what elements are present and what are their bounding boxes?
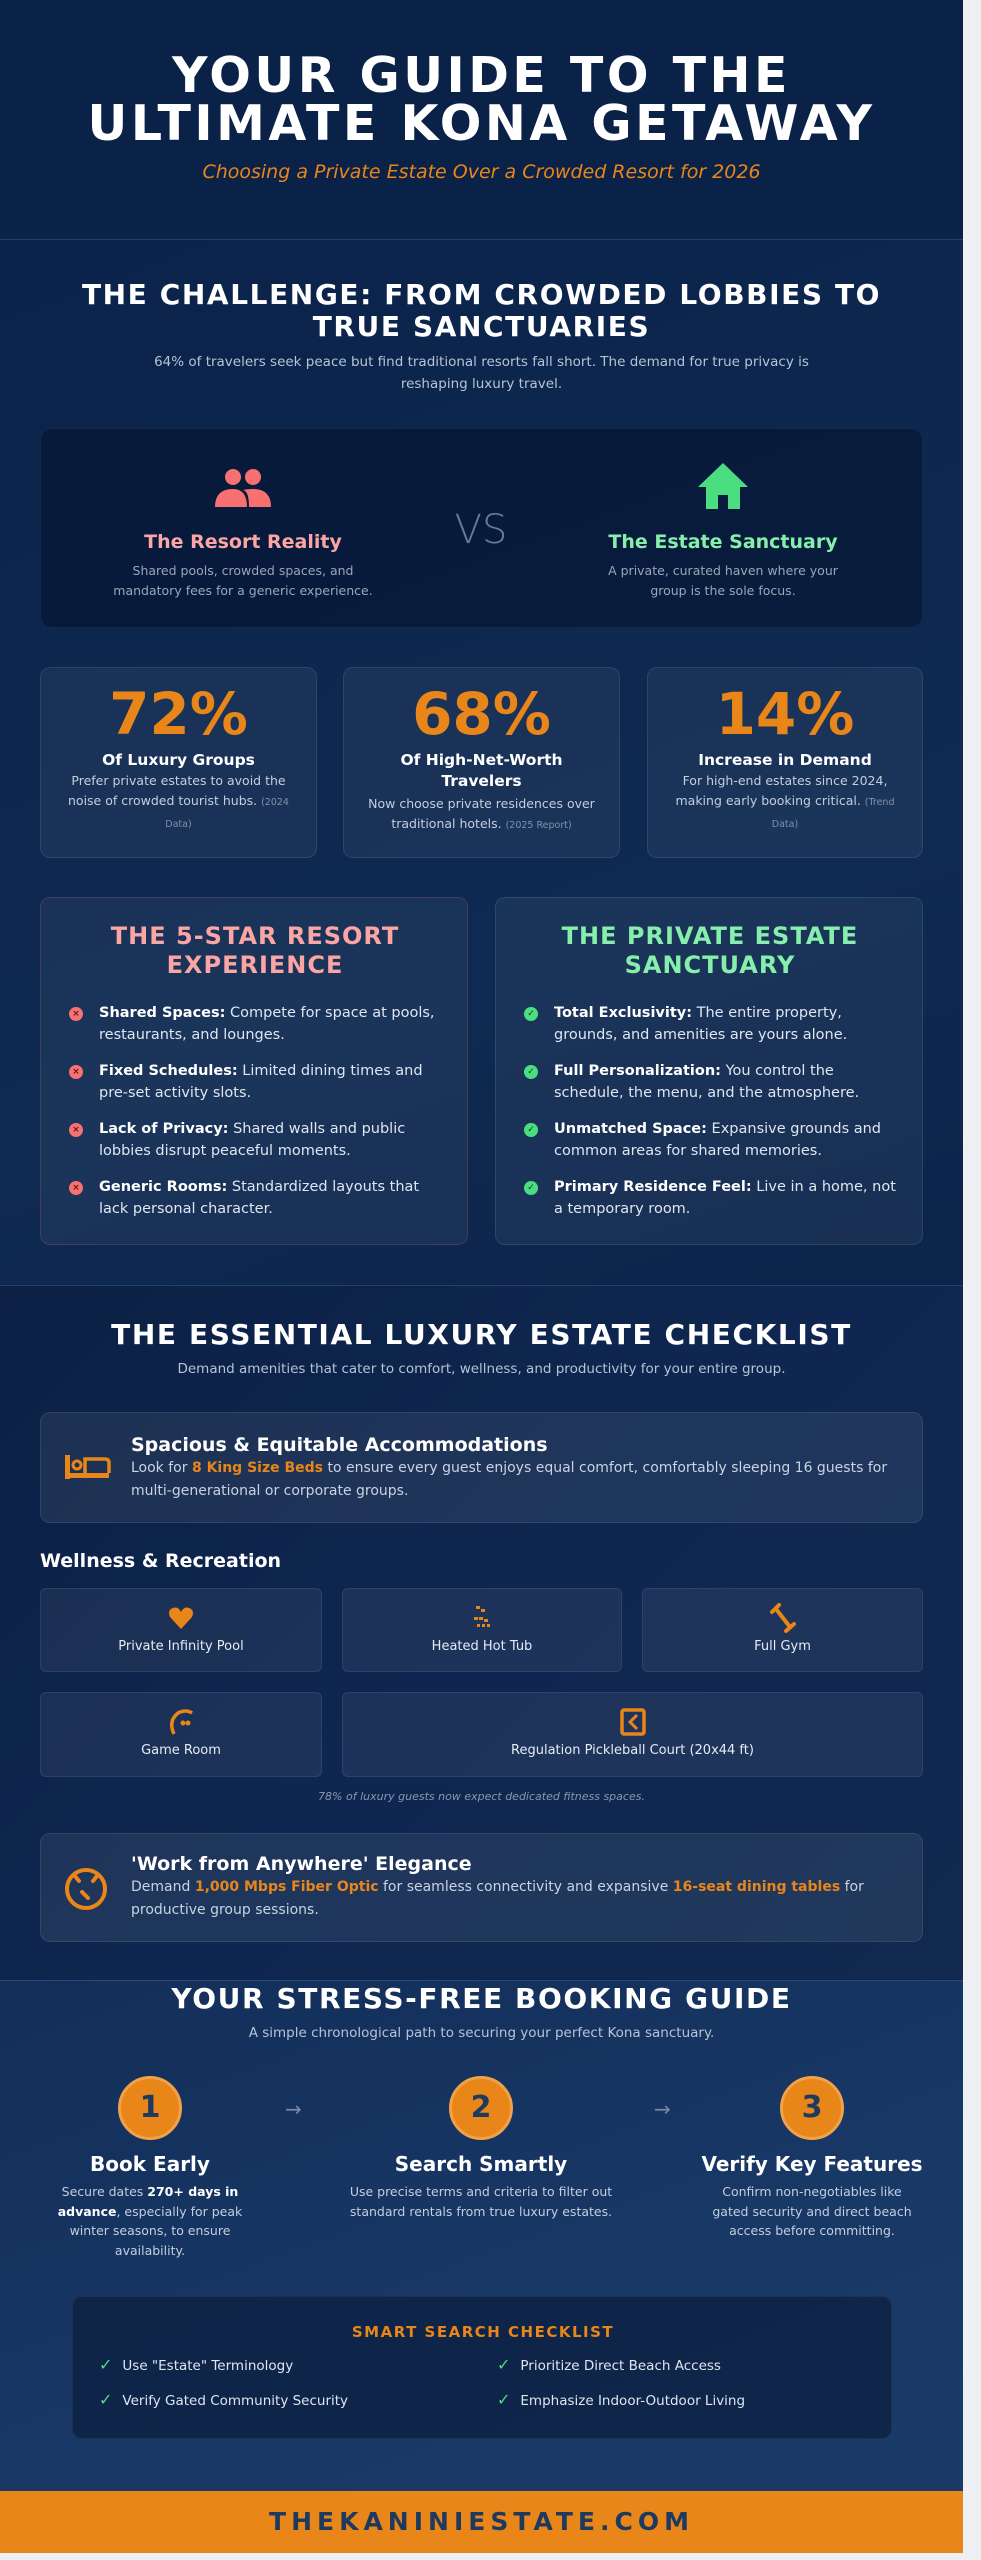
panel: resort experience <box>40 897 468 1245</box>
card: accommodations: Spacious & Equitable Accommodations <box>131 1434 548 1456</box>
section: checklist <box>0 1285 963 1980</box>
heading: YOUR STRESS-FREE BOOKING GUIDE <box>171 1982 792 2015</box>
tile: hot tub: Heated Hot Tub <box>432 1639 532 1654</box>
items <box>524 1005 896 1217</box>
panel: private estate <box>495 897 923 1245</box>
heading: SANCTUARY <box>625 951 795 979</box>
icon: gauge <box>65 1868 107 1910</box>
items: Full Personalization: You control the schedule, the menu, and the atmosphere. <box>554 1063 859 1101</box>
tile: game room <box>40 1692 322 1777</box>
items: Fixed Schedules: Limited dining times and pre-set activity slots. <box>99 1063 423 1101</box>
icon: house <box>698 463 748 509</box>
subheading: Demand amenities that cater to comfort, wellness, and productivity for your entire group. <box>177 1361 786 1377</box>
resort reality: The Resort Reality <box>144 531 342 553</box>
card: accommodations <box>40 1412 923 1523</box>
step 3: Confirm non-negotiables like gated security and direct beach access before committing. <box>712 2184 912 2238</box>
stat card 3: Increase in Demand <box>698 751 872 769</box>
header <box>0 0 963 240</box>
tile: pool <box>40 1588 322 1672</box>
checklist items: ✓ Prioritize Direct Beach Access <box>497 2355 721 2374</box>
heading <box>110 922 399 979</box>
stat card 1 <box>40 667 317 858</box>
section heading: challenge: THE CHALLENGE: FROM CROWDED LOBBIES TO <box>82 278 881 311</box>
step 3: Verify Key Features <box>701 2152 923 2176</box>
tile: game room: Game Room <box>141 1743 221 1758</box>
step 2: 2 <box>471 2090 491 2125</box>
estate sanctuary: A private, curated haven where your <box>608 563 838 578</box>
items: × <box>72 1009 80 1019</box>
heading: THE ESSENTIAL LUXURY ESTATE CHECKLIST <box>111 1318 852 1351</box>
subtitle: Choosing a Private Estate Over a Crowded Resort for 2026 <box>202 161 761 183</box>
checklist title: SMART SEARCH CHECKLIST <box>352 2323 614 2341</box>
tile: gym: Full Gym <box>754 1639 811 1654</box>
heading: THE PRIVATE ESTATE <box>562 922 858 950</box>
card: accommodations: Look for 8 King Size Beds to ensure every guest enjoys equal comfort, comfortably sleeping 16 guests for multi-generational or corporate groups. <box>131 1460 887 1499</box>
items: Shared Spaces: Compete for space at pools, restaurants, and lounges. <box>99 1005 435 1043</box>
section heading: challenge <box>82 278 881 343</box>
card: work: 'Work from Anywhere' Elegance <box>131 1853 472 1875</box>
stat card 2: Travelers <box>441 772 522 790</box>
checklist items: ✓ Verify Gated Community Security <box>99 2390 348 2409</box>
items: Total Exclusivity: The entire property, grounds, and amenities are yours alone. <box>554 1005 847 1043</box>
step 1 <box>58 2076 242 2258</box>
title: YOUR GUIDE TO THE <box>172 47 791 104</box>
stat card 2 <box>343 667 620 858</box>
arrow: → <box>285 2097 302 2121</box>
step 2 <box>350 2076 612 2218</box>
items: × <box>72 1067 80 1077</box>
items: ✓ <box>527 1067 535 1077</box>
note: 78% of luxury guests now expect dedicated fitness spaces. <box>318 1790 645 1803</box>
step 1: Secure dates 270+ days in advance, especially for peak winter seasons, to ensure availability. <box>58 2184 242 2258</box>
heading <box>562 922 858 979</box>
section: booking guide <box>0 1980 963 2491</box>
heading: EXPERIENCE <box>167 951 343 979</box>
items: ✓ <box>527 1125 535 1135</box>
heading: THE 5-STAR RESORT <box>111 922 399 950</box>
heading: wellness: Wellness & Recreation <box>40 1550 281 1572</box>
subheading: A simple chronological path to securing your perfect Kona sanctuary. <box>249 2025 714 2041</box>
checklist items <box>99 2355 745 2409</box>
step 1: Book Early <box>90 2152 210 2176</box>
estate sanctuary: group is the sole focus. <box>650 583 796 598</box>
items: Lack of Privacy: Shared walls and public lobbies disrupt peaceful moments. <box>99 1121 405 1159</box>
panel: comparison <box>40 428 923 628</box>
footer: THEKANINIESTATE.COM <box>269 2507 694 2536</box>
estate sanctuary: The Estate Sanctuary <box>608 531 838 553</box>
card: work: Demand 1,000 Mbps Fiber Optic for seamless connectivity and expansive 16-seat dining tables for productive group sessions. <box>131 1879 864 1918</box>
arrow: → <box>654 2097 671 2121</box>
tile: pickleball: Regulation Pickleball Court (20x44 ft) <box>511 1743 754 1758</box>
stat card 1: Of Luxury Groups <box>102 751 255 769</box>
stat card 3 <box>647 667 923 858</box>
step 1: 1 <box>140 2090 160 2125</box>
items: ✓ <box>527 1183 535 1193</box>
vs: VS <box>455 507 507 553</box>
items: Primary Residence Feel: Live in a home, not a temporary room. <box>554 1179 896 1217</box>
checklist items: ✓ Use "Estate" Terminology <box>99 2355 293 2374</box>
step 3 <box>701 2076 923 2238</box>
items: Generic Rooms: Standardized layouts that lack personal character. <box>99 1179 419 1217</box>
stat card 2: Now choose private residences over traditional hotels. (2025 Report) <box>368 796 595 831</box>
step 2: Search Smartly <box>395 2152 567 2176</box>
footer <box>0 2491 963 2553</box>
resort reality: Shared pools, crowded spaces, and <box>133 563 353 578</box>
resort reality: mandatory fees for a generic experience. <box>113 583 373 598</box>
panel: smart search checklist <box>72 2296 892 2439</box>
tile: hot tub <box>342 1588 622 1672</box>
items <box>69 1005 435 1217</box>
step 2: Use precise terms and criteria to filter out standard rentals from true luxury estates. <box>350 2184 612 2218</box>
stat card 1: 72% <box>109 680 248 748</box>
stat card 2: Of High-Net-Worth <box>400 751 563 769</box>
step 3: 3 <box>802 2090 822 2125</box>
resort reality <box>113 531 373 598</box>
card: work <box>40 1833 923 1942</box>
tile: pool: Private Infinity Pool <box>118 1639 244 1654</box>
section heading: challenge: TRUE SANCTUARIES <box>313 310 650 343</box>
icon: people <box>215 469 271 507</box>
items: × <box>72 1183 80 1193</box>
icon: bed <box>65 1455 111 1479</box>
tile: gym <box>642 1588 923 1672</box>
checklist items: ✓ Emphasize Indoor-Outdoor Living <box>497 2390 745 2409</box>
intro text: 64% of travelers seek peace but find traditional resorts fall short. The demand for true privacy is reshaping luxury travel. <box>154 354 809 392</box>
items: Unmatched Space: Expansive grounds and common areas for shared memories. <box>554 1121 881 1159</box>
title <box>88 47 875 152</box>
items: ✓ <box>527 1009 535 1019</box>
tile: pickleball <box>342 1692 923 1777</box>
stat card 1: Prefer private estates to avoid the noise of crowded tourist hubs. (2024 Data) <box>68 773 289 830</box>
stat card 2: 68% <box>412 680 551 748</box>
stat card 3: For high-end estates since 2024, making early booking critical. (Trend Data) <box>675 773 894 830</box>
items: × <box>72 1125 80 1135</box>
estate sanctuary <box>608 531 838 598</box>
title: ULTIMATE KONA GETAWAY <box>88 95 875 152</box>
stat card 3: 14% <box>716 680 854 748</box>
